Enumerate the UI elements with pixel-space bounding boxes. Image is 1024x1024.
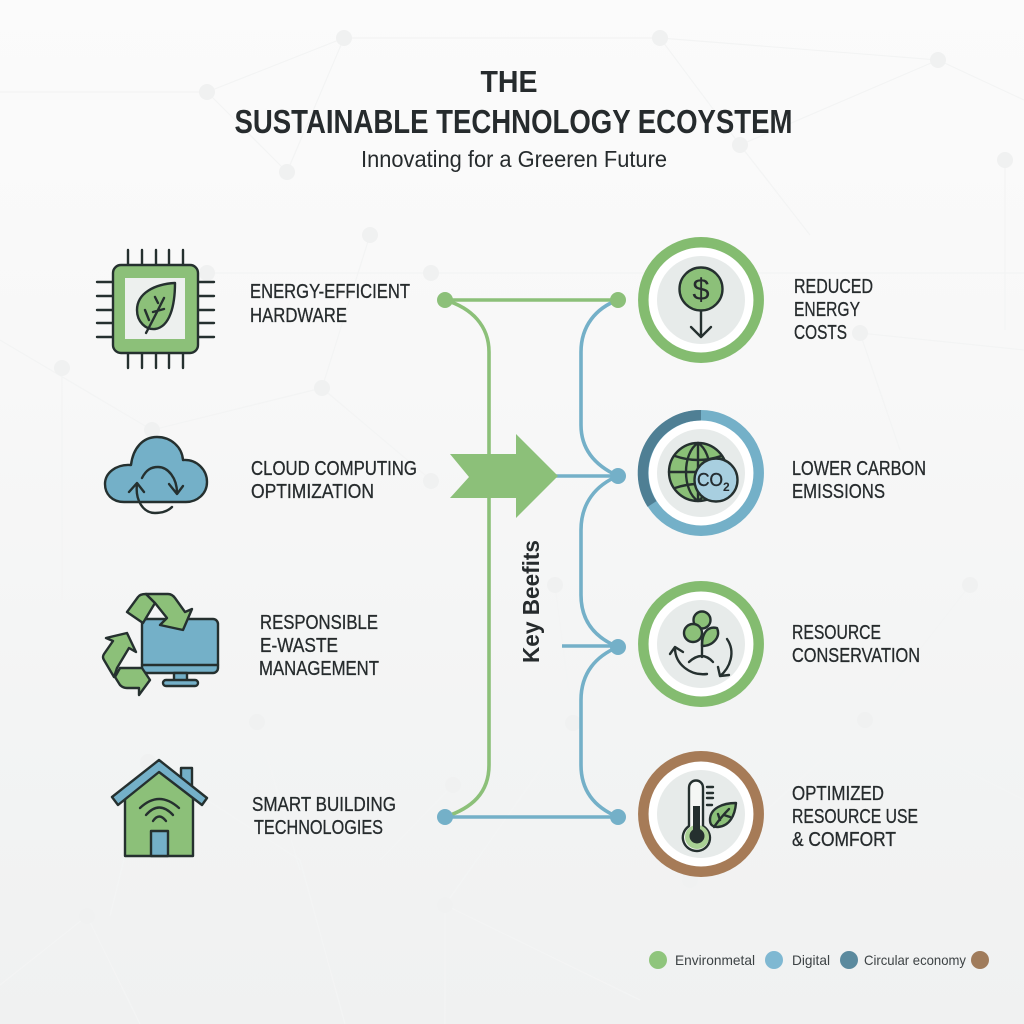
- icon: lower carbon emissions badge: CO: [697, 470, 723, 490]
- label: reduced energy costs: REDUCED: [794, 276, 873, 298]
- label: responsible e-waste management: RESPONSIBLE: [260, 612, 378, 634]
- label: smart building technologies: SMART BUILDING: [252, 794, 396, 816]
- label: reduced energy costs: [794, 276, 873, 344]
- legend: Digital: [792, 952, 830, 968]
- label: responsible e-waste management: MANAGEMENT: [259, 658, 379, 680]
- label: smart building technologies: [252, 794, 396, 839]
- label: energy-efficient hardware: ENERGY-EFFICIENT: [250, 281, 410, 303]
- icon: lower carbon emissions badge: [643, 415, 759, 531]
- label: reduced energy costs: ENERGY: [794, 299, 860, 321]
- label: lower carbon emissions: [792, 458, 926, 503]
- legend: Circular economy: [864, 952, 966, 968]
- label: reduced energy costs: COSTS: [794, 322, 847, 344]
- label: optimized resource use and comfort: OPTIMIZED: [792, 783, 884, 805]
- subtitle: Innovating for a Greeren Future: [361, 146, 667, 172]
- label: resource conservation: RESOURCE: [792, 622, 881, 644]
- label: optimized resource use and comfort: & COMFORT: [792, 829, 896, 851]
- central arrow: [450, 434, 558, 518]
- icon: recycling monitor: [103, 594, 218, 695]
- label: responsible e-waste management: E-WASTE: [260, 635, 338, 657]
- label: lower carbon emissions: EMISSIONS: [792, 481, 885, 503]
- icon: resource conservation badge: [643, 586, 759, 702]
- title: SUSTAINABLE TECHNOLOGY ECOYSTEM: [234, 103, 792, 140]
- label: energy-efficient hardware: [250, 281, 410, 327]
- label: cloud computing optimization: OPTIMIZATION: [251, 481, 374, 503]
- label: cloud computing optimization: [251, 458, 417, 503]
- title: THE: [480, 64, 538, 99]
- label: responsible e-waste management: [259, 612, 379, 680]
- label: cloud computing optimization: CLOUD COMPUTING: [251, 458, 417, 480]
- icon: cloud with arrows: [105, 437, 207, 513]
- label: smart building technologies: TECHNOLOGIES: [254, 817, 383, 839]
- icon: smart house: [112, 760, 207, 856]
- icon: reduced energy costs badge: $: [692, 272, 710, 307]
- legend: [649, 951, 989, 969]
- label: optimized resource use and comfort: [792, 783, 918, 851]
- label: energy-efficient hardware: HARDWARE: [250, 305, 347, 327]
- icon: optimized resource thermometer badge: [643, 756, 759, 872]
- title: [234, 64, 792, 140]
- legend: Environmetal: [675, 952, 755, 968]
- icon: chip with leaf: [97, 250, 214, 368]
- label: resource conservation: CONSERVATION: [792, 645, 920, 667]
- label: optimized resource use and comfort: RESOURCE USE: [792, 806, 918, 828]
- key benefits label: Key Beefits: [518, 540, 544, 663]
- icon: reduced energy costs badge: [643, 242, 759, 358]
- label: resource conservation: [792, 622, 920, 667]
- icon: lower carbon emissions badge: 2: [723, 480, 730, 494]
- connector lines: [437, 292, 626, 825]
- label: lower carbon emissions: LOWER CARBON: [792, 458, 926, 480]
